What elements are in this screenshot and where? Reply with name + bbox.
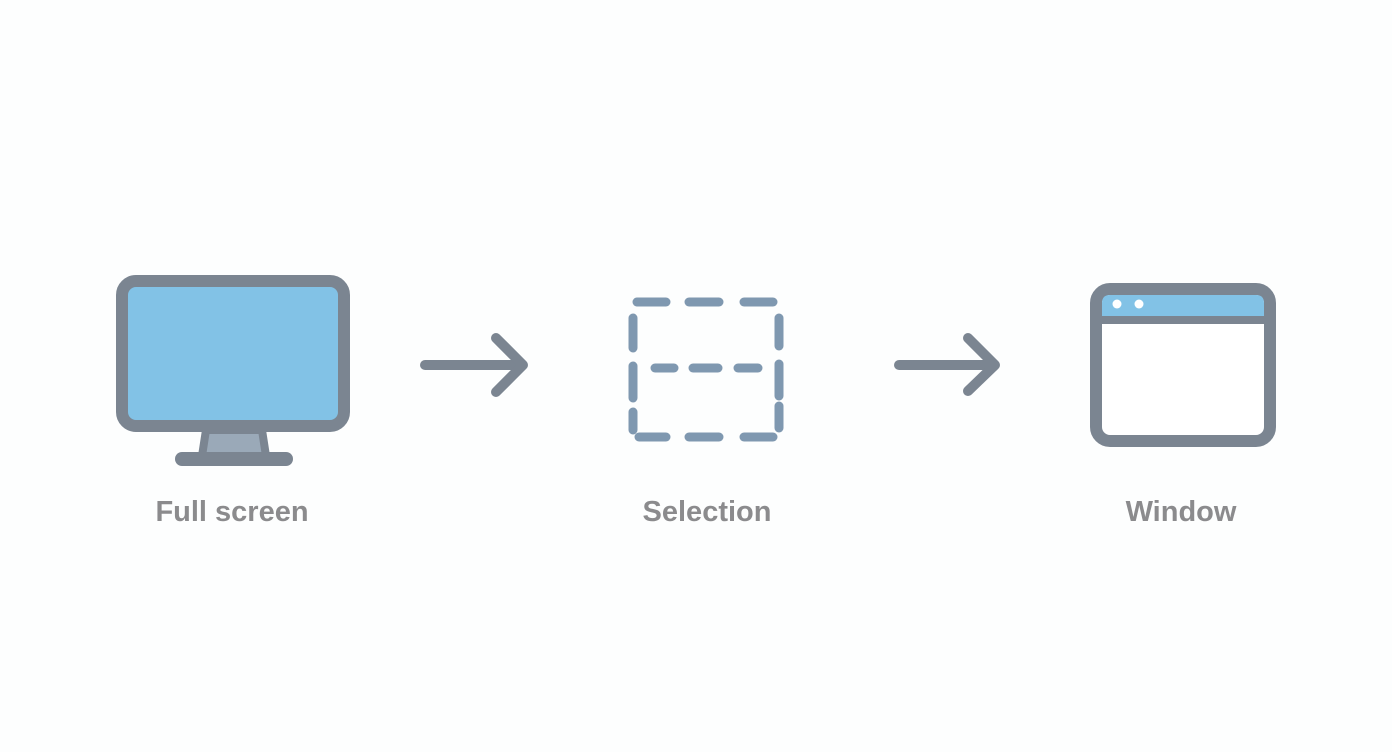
label: Selection: Selection [643, 496, 771, 528]
icon: dashed selection [633, 302, 779, 437]
label: Window: Window [1126, 496, 1237, 528]
panel: full screen [122, 281, 344, 528]
panel: window [1096, 289, 1270, 528]
icon: window [1096, 289, 1270, 441]
label: Full screen: Full screen [155, 496, 309, 528]
icon: monitor [122, 281, 344, 459]
arrow 1 [425, 338, 523, 392]
arrow 2 [899, 338, 995, 391]
